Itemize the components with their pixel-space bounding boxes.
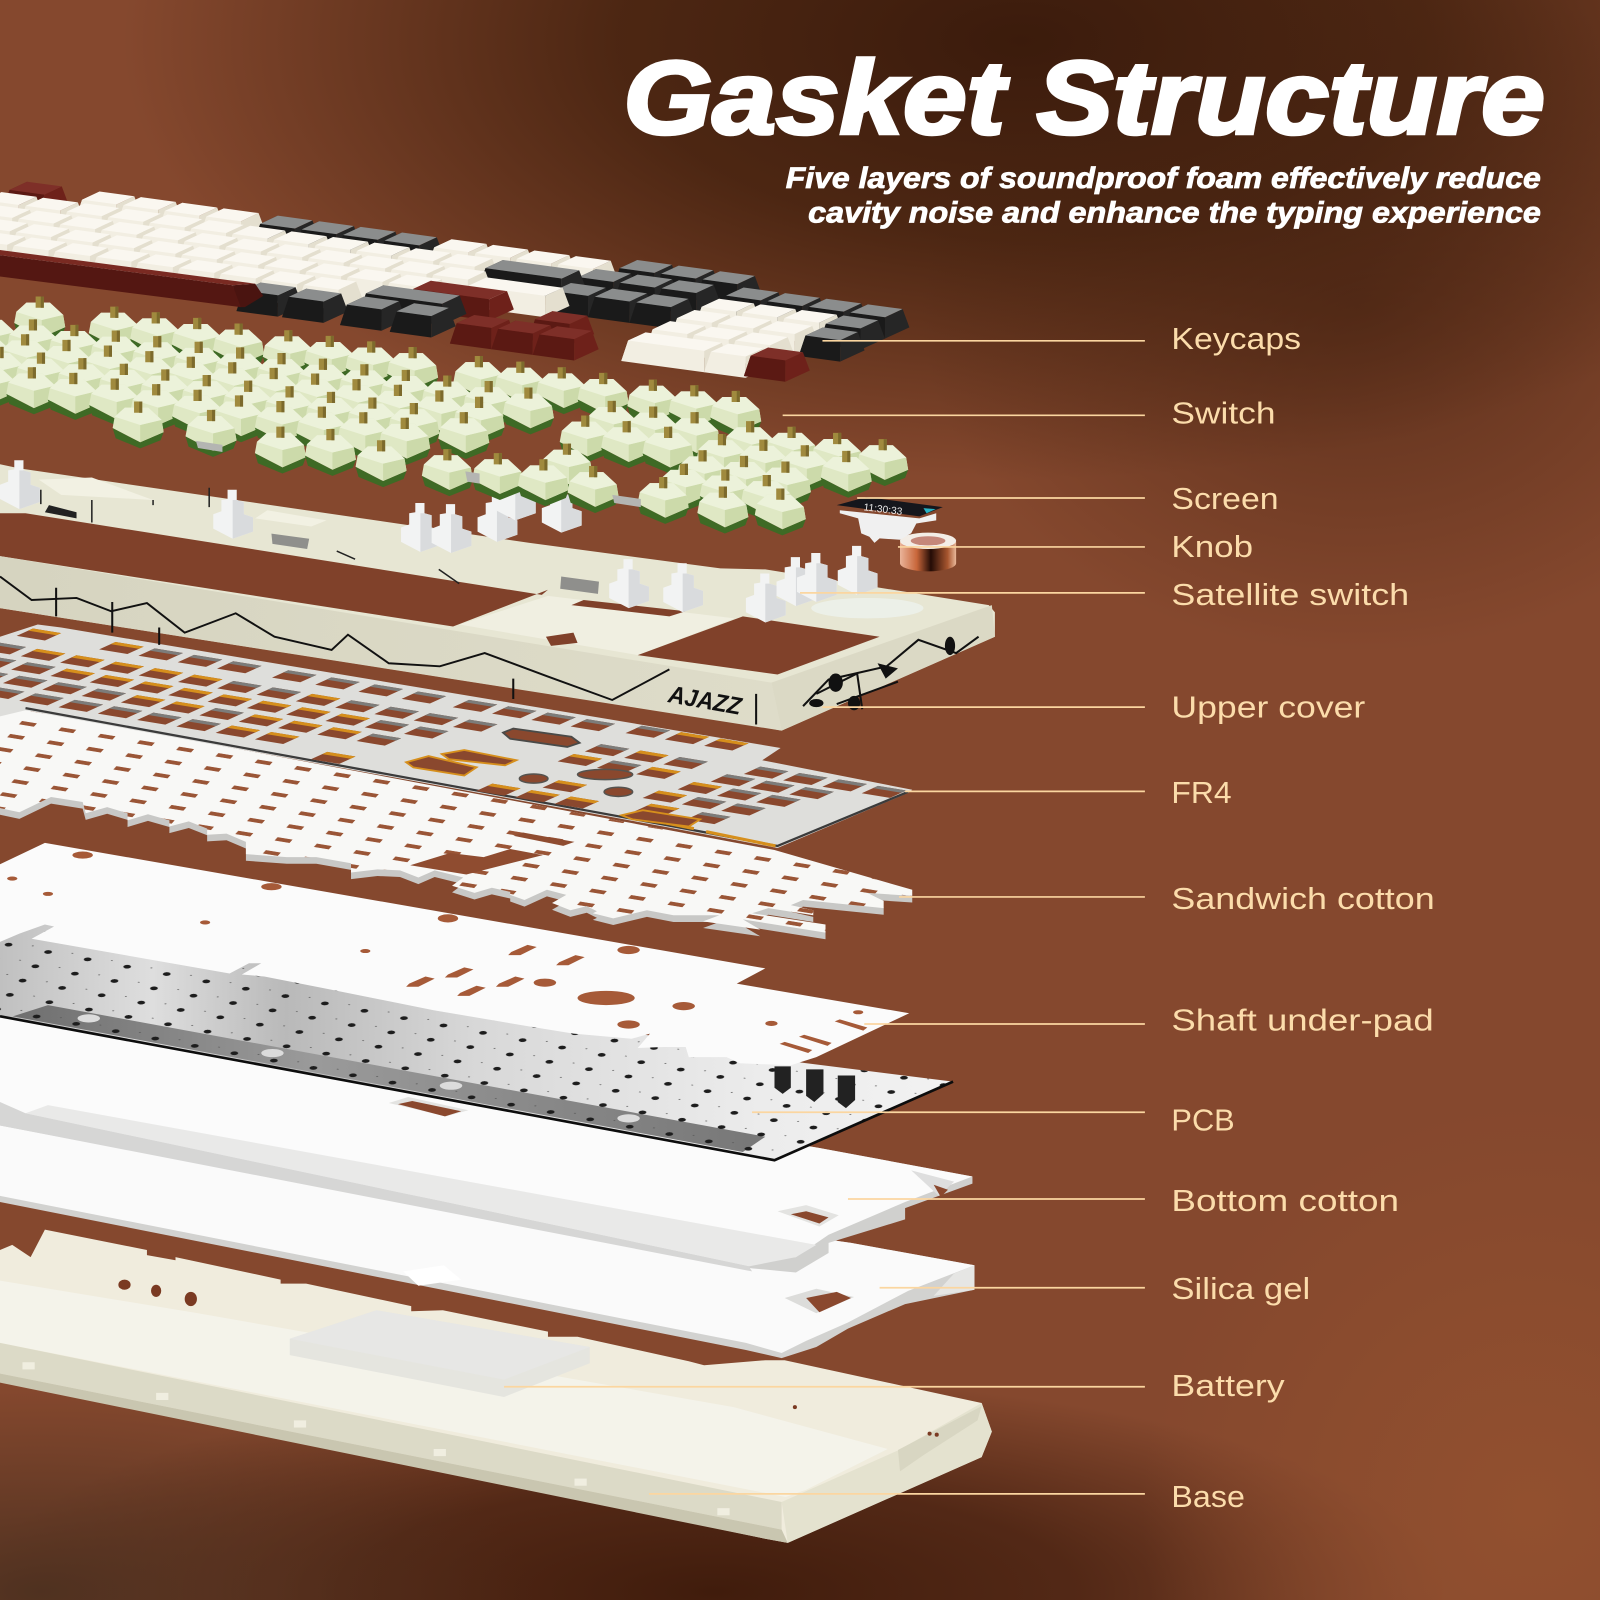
- pad cut-outs: [7, 852, 867, 1053]
- stabilizer bars: [196, 441, 641, 507]
- label: Base: Base: [1171, 1480, 1245, 1514]
- switches: [0, 290, 1039, 545]
- pcb connectors: [774, 1066, 855, 1108]
- bottom cotton: [0, 1010, 972, 1272]
- label: Silica gel: Silica gel: [1171, 1272, 1310, 1306]
- rear wall openings: [118, 1280, 939, 1437]
- label: Bottom cotton: Bottom cotton: [1171, 1184, 1399, 1218]
- brand logo: AJAZZ: [665, 681, 744, 721]
- space bar: [0, 250, 263, 307]
- knob: [900, 533, 956, 571]
- subtitle: Five layers of soundproof foam effectively reduce: [786, 162, 1541, 195]
- subtitle: cavity noise and enhance the typing experience: [808, 196, 1541, 229]
- front wall: [0, 556, 782, 731]
- label: Screen: Screen: [1171, 482, 1279, 516]
- satellite switches: [0, 460, 878, 622]
- subtitle: [786, 162, 1541, 229]
- oval cut-outs: [519, 769, 633, 796]
- screen: 11:30:33: [863, 502, 903, 518]
- cover openings: [0, 513, 548, 627]
- pcb mounting holes: [78, 1014, 640, 1122]
- shaft under-pad: [0, 843, 909, 1065]
- keycaps: [0, 166, 993, 395]
- label: PCB: PCB: [1171, 1104, 1235, 1138]
- label: Switch: Switch: [1171, 396, 1276, 430]
- silica gel: [0, 1122, 974, 1358]
- label: Upper cover: Upper cover: [1171, 690, 1365, 724]
- label: Keycaps: Keycaps: [1171, 322, 1301, 356]
- rear rail inner lip: [39, 478, 153, 500]
- battery: [290, 1310, 590, 1397]
- stabilizer cut-outs: [406, 729, 700, 827]
- label: FR4: FR4: [1171, 776, 1232, 810]
- base: [0, 1230, 992, 1543]
- wall artwork blobs: [809, 637, 955, 710]
- label: Shaft under-pad: Shaft under-pad: [1171, 1004, 1434, 1038]
- clear stabilizers: [811, 598, 923, 618]
- label: Battery: Battery: [1171, 1369, 1285, 1403]
- label: Knob: Knob: [1171, 530, 1253, 564]
- label: Sandwich cotton: Sandwich cotton: [1171, 882, 1435, 916]
- label: Satellite switch: Satellite switch: [1171, 578, 1409, 612]
- front wall slots: [22, 1362, 730, 1515]
- FR4 plate: [0, 624, 941, 848]
- plate switch holes: [0, 626, 941, 843]
- pcb: [0, 918, 953, 1160]
- large openings: [410, 849, 543, 874]
- rail art marks: [41, 488, 459, 584]
- grey foam blocks: [271, 534, 599, 594]
- wall artwork: [0, 577, 669, 700]
- title: Gasket Structure: [623, 41, 1545, 157]
- right wall: [771, 605, 995, 731]
- screen: [837, 497, 943, 543]
- upper cover: [0, 460, 995, 731]
- sandwich cotton: [0, 704, 912, 939]
